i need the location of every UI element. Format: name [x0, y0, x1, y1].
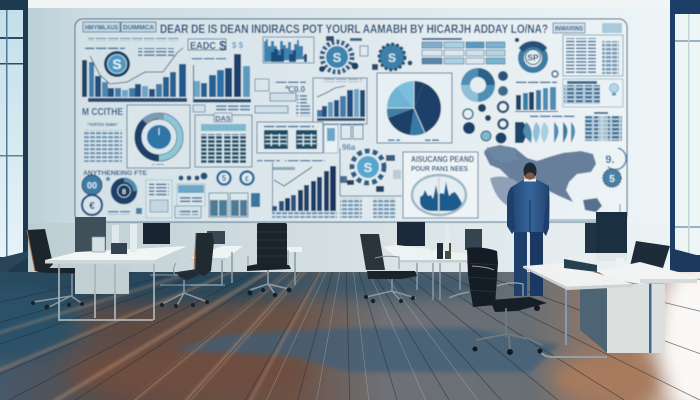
coin icons: bottom left: 00: [87, 180, 97, 190]
bar chart: top left: [82, 38, 187, 102]
icon: dollar coin: S: [112, 56, 122, 72]
chair: left centre: [160, 233, 214, 308]
right desk pedestal: [541, 283, 665, 357]
gauge with SP badge: [515, 38, 558, 77]
circular badges: right: [550, 148, 627, 220]
dashboard panel: [193, 105, 252, 167]
gear illustration: top middle: S: [333, 50, 342, 65]
pedestal: left desk: [75, 266, 129, 294]
petal shapes row: [515, 115, 575, 143]
centre right desk: [383, 225, 470, 300]
label: EADC dollar: [188, 38, 244, 53]
bar chart: centre left: [190, 54, 251, 102]
small tables: bottom centre: [209, 193, 260, 217]
dashboard panel: DAS: [215, 114, 231, 123]
gear illustration: top centre: S: [388, 51, 396, 65]
notes and small icons: ℃0.0: [285, 85, 306, 94]
chair: foreground: [467, 247, 547, 355]
heading badge: DUIMMCA: [123, 24, 154, 32]
donut: bottom left: [108, 178, 142, 214]
gear icons: bottom centre: £: [245, 176, 249, 183]
heading badge: [83, 22, 156, 32]
chair: behind right desk: [630, 241, 670, 271]
wall area below poster: [24, 223, 670, 273]
gear icons: bottom centre: 5: [222, 174, 227, 183]
donut chart: [461, 68, 495, 102]
poster frame: [75, 19, 627, 222]
label: EADC dollar: $ $: [232, 41, 244, 50]
chair: far left: [27, 229, 88, 310]
wooden floor: [0, 272, 700, 400]
floor shadow band: [172, 328, 560, 372]
gear illustration: lower centre: S: [364, 160, 373, 175]
monitor: small rear: [207, 231, 225, 244]
bar chart: right: [515, 81, 558, 112]
callout: pension chart: POUR PAN1 NEES: [411, 164, 468, 173]
grey table: right: [585, 112, 622, 141]
chair: centre: [247, 223, 292, 297]
monitor: centre right second: [465, 229, 482, 250]
gear illustration: top centre: [360, 44, 412, 70]
gear icons: bottom centre: [218, 172, 254, 184]
gauge with SP badge: SP: [527, 52, 539, 62]
icon tiles: centre: 96a: [342, 143, 356, 152]
gauge panel: [127, 105, 190, 168]
monitor: right desk main: [596, 212, 627, 267]
right desk top: [523, 262, 697, 290]
heading: bottom left: ANYTHENEING FTE: [83, 170, 147, 177]
front left desk: [45, 224, 187, 320]
person in suit: [507, 162, 550, 296]
label: EADC dollar: EADC: [190, 41, 216, 52]
data table: left: [83, 122, 122, 162]
text list block: INWARINS: [555, 26, 584, 32]
rising bar chart with line: [257, 160, 337, 218]
text list block: [553, 23, 623, 76]
world map: [484, 145, 602, 212]
icon tiles: centre: [324, 125, 363, 153]
circular badges: right: 5: [609, 174, 615, 185]
icon: dollar coin: [104, 51, 130, 77]
bar chart: panel: [313, 78, 367, 124]
donut: bottom left: 8: [122, 189, 126, 196]
title: DEAR DE IS DEAN INDIRACS POT YOURL AAMABH BY HICARJH ADDAY LO/NA?: [160, 22, 548, 36]
callout: pension chart: AISUCANG PEAND: [411, 154, 474, 164]
monitor: left desk rear: [75, 217, 106, 252]
side table: centre: [278, 247, 302, 285]
rear desk: [150, 246, 243, 285]
colour table: top: [422, 38, 505, 64]
circular icons beside donut: [463, 71, 508, 144]
coin icons: bottom left: [82, 175, 110, 215]
small table with bulb: [563, 79, 623, 107]
chair: centre right: [360, 234, 417, 303]
gear illustration: top middle: [319, 36, 362, 72]
wall: [0, 0, 700, 275]
pie chart panel: [377, 73, 452, 143]
coin icons: bottom left: €: [89, 201, 95, 212]
skyline chart: [263, 37, 314, 63]
monitor: left desk dark: [143, 223, 170, 244]
left window: [0, 0, 28, 276]
desk device box: [564, 259, 597, 272]
mini panels and dots: [175, 172, 208, 218]
dashboard: bottom centre: [146, 180, 172, 218]
ceiling: [0, 0, 700, 8]
right window: [670, 0, 700, 278]
dark tables panel: [257, 122, 323, 153]
gear illustration: lower centre: [340, 148, 402, 196]
poster wall: [75, 19, 627, 222]
label: EADC dollar: $: [219, 38, 227, 53]
monitor: centre right: [397, 222, 425, 246]
callout: pension chart: [403, 152, 478, 218]
circular badges: right: 9.: [605, 154, 615, 166]
monitor: right desk back: [585, 223, 597, 253]
heading: M CCITHE: M CCITHE: [82, 106, 123, 118]
table strip: lower centre: [340, 198, 396, 218]
heading badge: HMYIMLAUS: [85, 24, 119, 32]
notes and small icons: [255, 79, 310, 116]
data table: left: "TURTOO SUMA": [87, 122, 118, 127]
